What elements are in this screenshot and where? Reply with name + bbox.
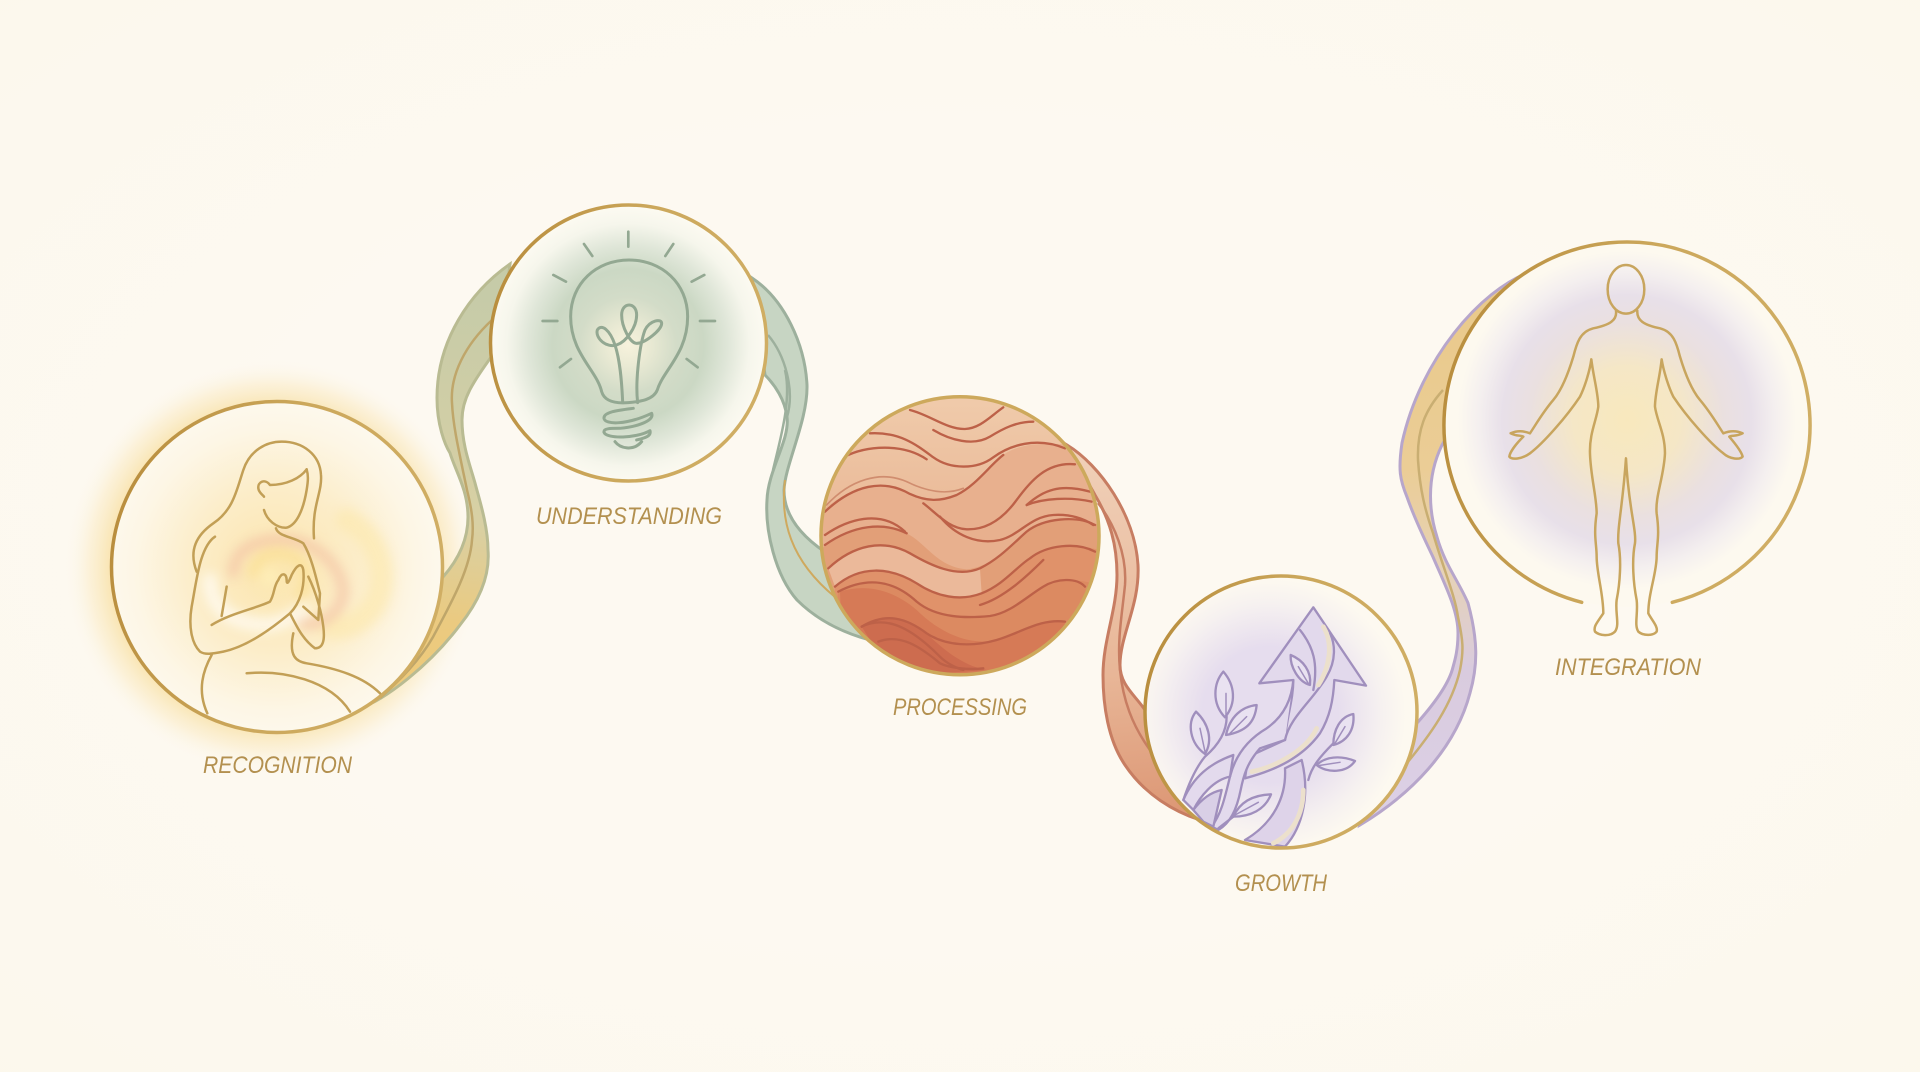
swirl glow	[210, 520, 381, 627]
label: understanding: UNDERSTANDING	[536, 503, 722, 530]
label: processing: PROCESSING	[893, 694, 1027, 721]
ring	[1145, 576, 1417, 848]
label: integration: INTEGRATION	[1555, 654, 1702, 681]
label: growth: GROWTH	[1235, 870, 1328, 897]
label: recognition: RECOGNITION	[203, 752, 353, 779]
stage 3: processing circle with waves	[820, 397, 1103, 677]
icon: light bulb	[543, 232, 715, 448]
ribbon: recognition to understanding	[360, 264, 510, 708]
ring	[821, 397, 1099, 675]
icon: vine arrow	[1183, 607, 1366, 847]
open ring	[1444, 242, 1810, 602]
stage 4: growth circle with vine arrow	[1145, 576, 1417, 848]
leaves	[1191, 655, 1355, 817]
wave pattern	[820, 407, 1103, 677]
ribbon: growth to integration	[1360, 272, 1530, 825]
ribbon: understanding to processing	[752, 278, 870, 640]
glow: recognition halo	[64, 359, 480, 775]
stage 2: understanding circle with light bulb	[490, 205, 766, 481]
ribbon: processing to growth	[1067, 445, 1200, 820]
woman figure	[190, 442, 380, 713]
stage 1: recognition circle with figure	[112, 402, 442, 732]
human figure	[1509, 265, 1743, 635]
stage 5: integration open ring with body	[1444, 242, 1810, 635]
